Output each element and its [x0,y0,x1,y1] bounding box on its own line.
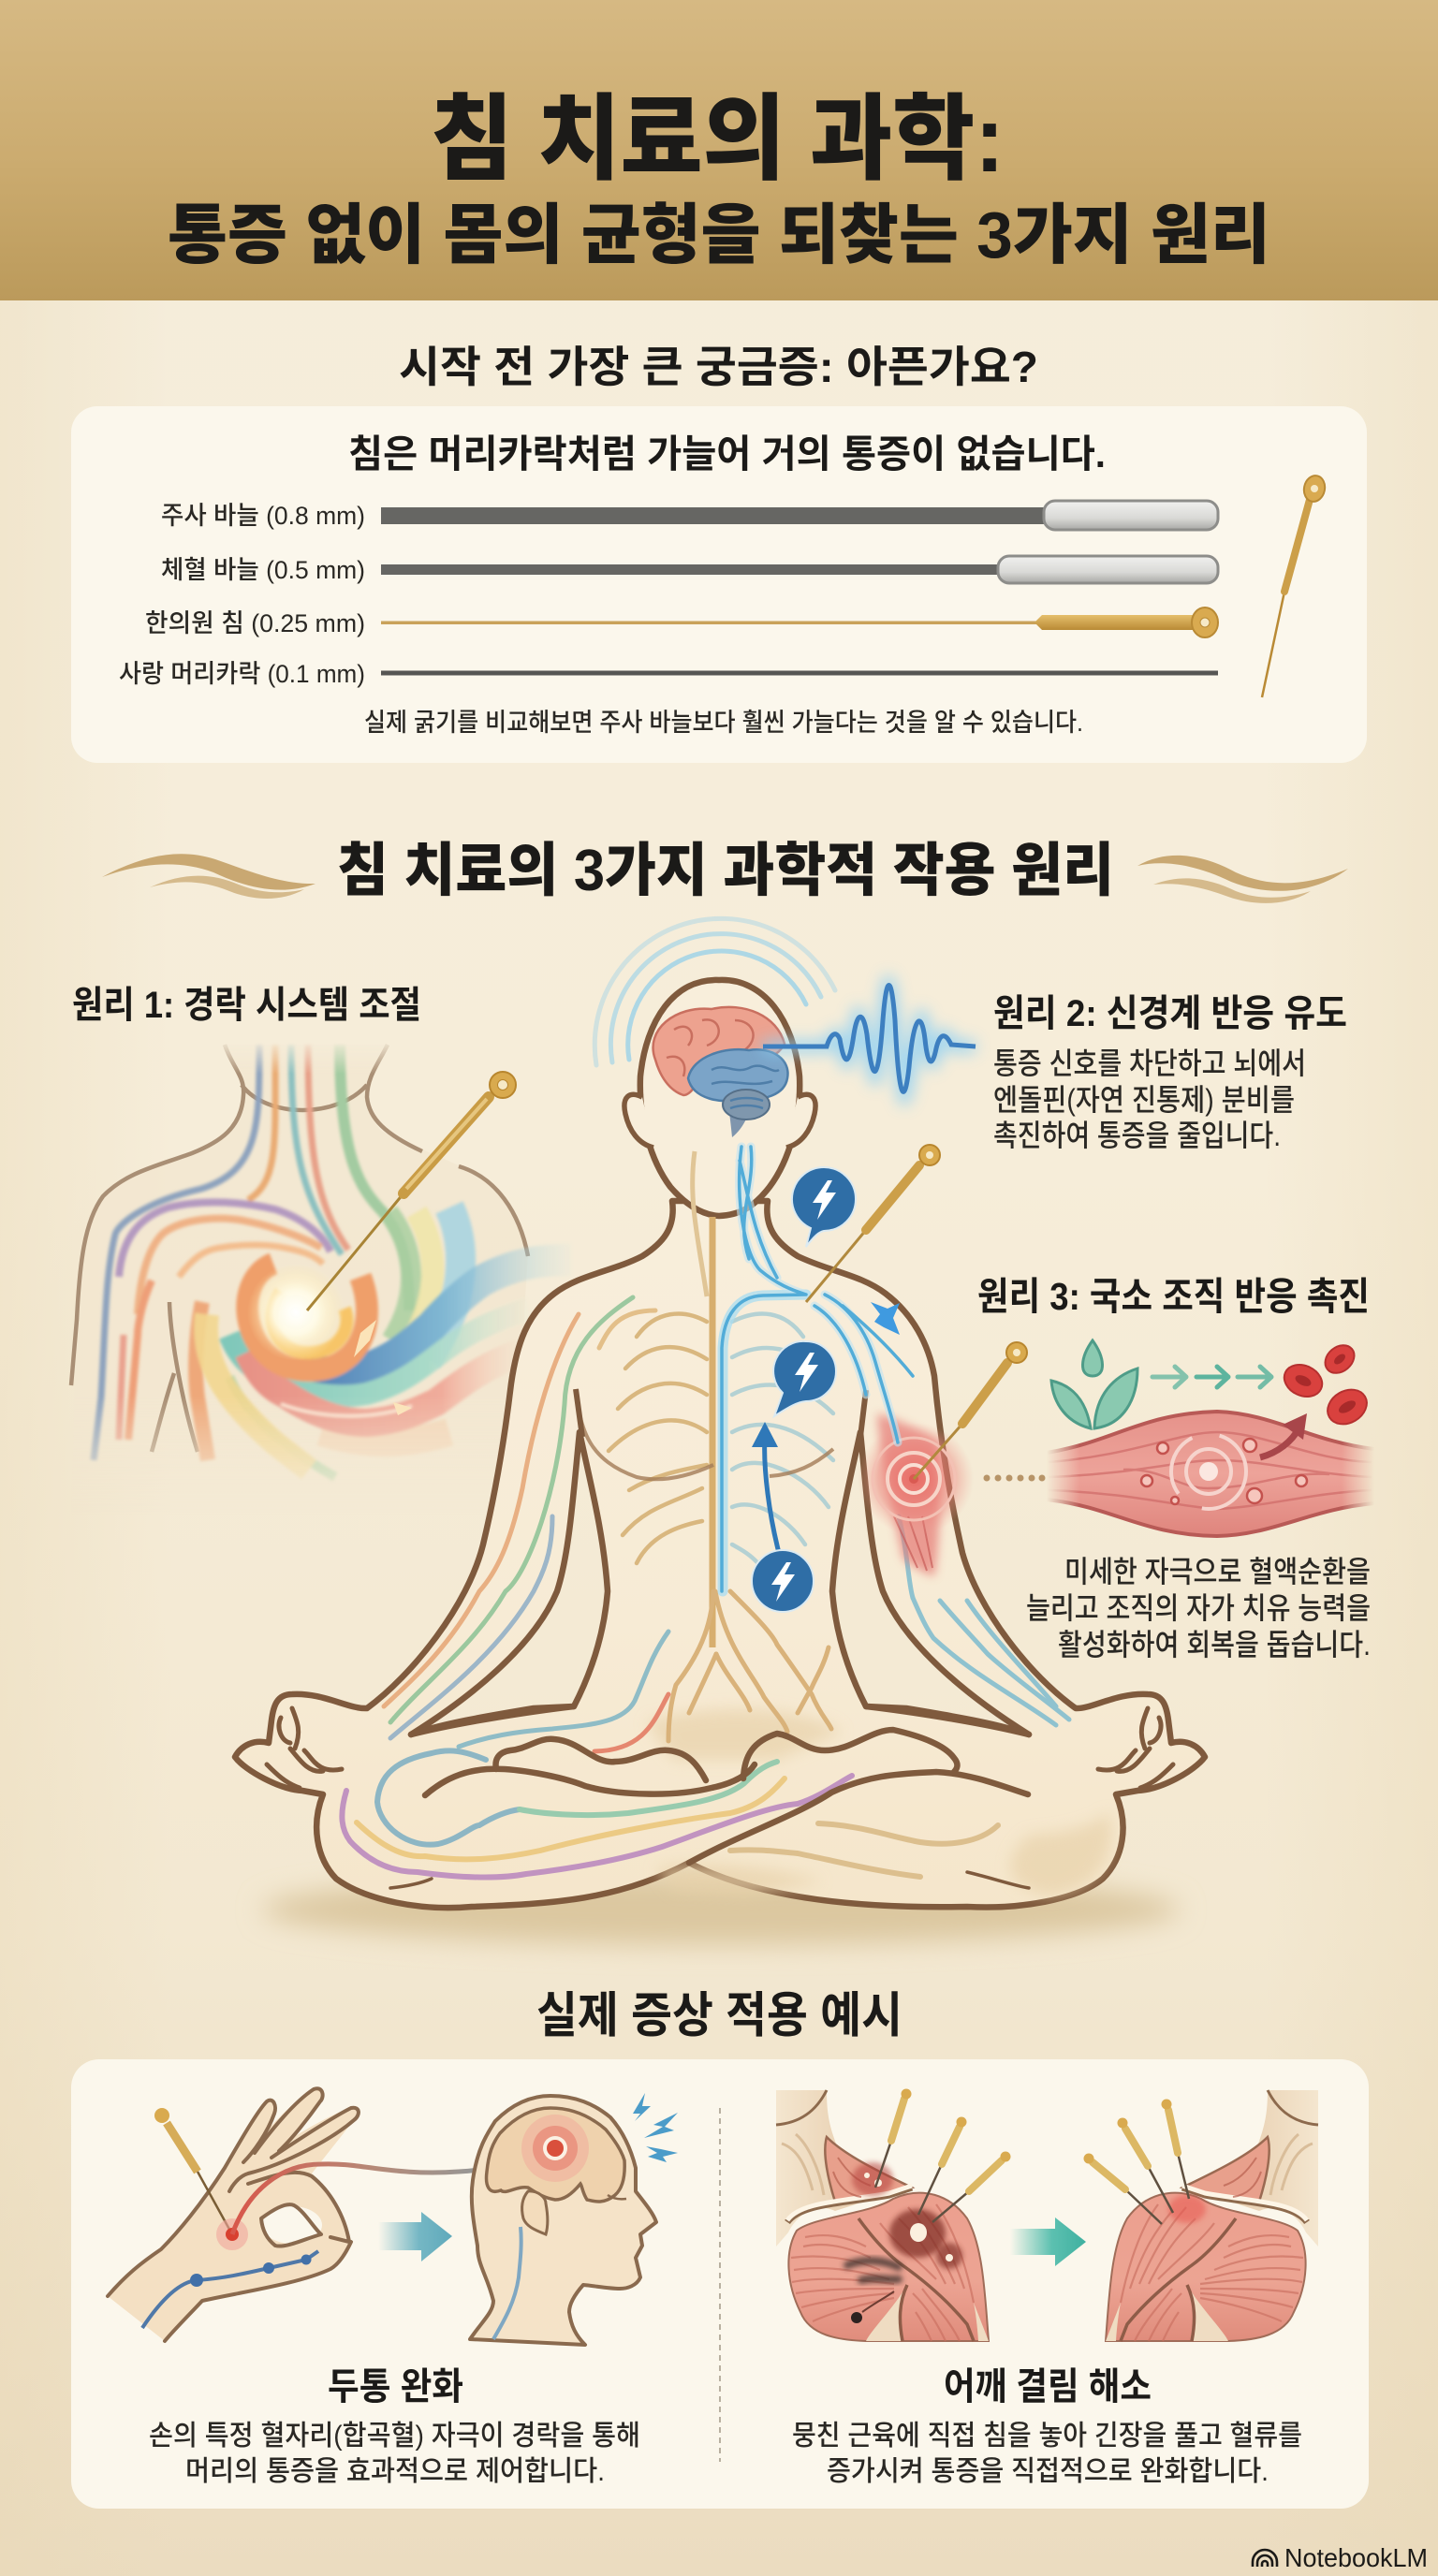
row: acupuncture needle [145,607,1218,637]
row: blood needle [161,556,1218,584]
body silhouette [235,1201,1205,1908]
row: acupuncture needle: 한의원 침 (0.25 mm) [145,609,365,637]
panel: symptom examples [71,2059,1369,2509]
flow arrowheads [354,1320,412,1415]
illustration: tense shoulder [776,2089,1011,2341]
needles [875,2089,1011,2222]
text: principle 3 description [1026,1555,1371,1661]
hand details [267,1708,1173,1888]
body shading [646,1709,1111,1895]
row: human hair [119,660,1218,688]
head [640,980,800,1216]
torso outlines [71,1045,528,1452]
icon: needle on shoulder [806,1145,940,1302]
pain area upper arm [858,1413,974,1576]
leg and foot outlines [411,1706,1029,1863]
text: shoulder description: 증가시켜 통증을 직접적으로 완화합니다. [827,2456,1269,2487]
text: shoulder description [792,2421,1302,2487]
brain [653,1007,788,1137]
illustration: relaxed shoulder [1084,2090,1318,2341]
label: principle 2 [993,993,1347,1152]
nerve pathways [722,1147,913,1591]
tension spots [847,2162,962,2323]
icon: gold needle [1262,474,1328,697]
icon: spark [871,1302,900,1335]
ribs left [609,1314,707,1563]
row: blood needle: 체혈 바늘 (0.5 mm) [161,556,365,584]
badge: lightning 3 [752,1550,814,1612]
connector nerve curve [232,2153,550,2234]
title line 2: 통증 없이 몸의 균형을 되찾는 3가지 원리 [168,198,1270,271]
arm crease left [576,1389,866,1437]
arrow [1010,2217,1086,2266]
acupoint [216,2218,248,2250]
title banner [0,0,1438,300]
icon: needle on arm [914,1342,1027,1479]
panel: needle thickness comparison [71,406,1367,763]
logo: NotebookLM: NotebookLM [1284,2543,1428,2572]
decorative swash left [102,854,315,899]
ribs right [732,1314,833,1610]
chest lines [576,1389,833,1479]
illustration: hand acupoint [108,2088,359,2341]
left arm meridians [384,1297,655,1738]
muscle fibre [1047,1412,1374,1536]
title line 1: 침 치료의 과학: [431,87,1005,192]
illustration: meridian system torso [71,1045,571,1516]
spine gold [694,1161,720,1694]
connector dots [983,1475,1045,1481]
badge: lightning 2 [773,1341,836,1416]
nerve arrow [752,1422,779,1553]
torso fill [71,1045,528,1516]
heading: biggest question: 시작 전 가장 큰 궁금증: 아픈가요? [399,343,1038,391]
text: principle 3 description: 늘리고 조직의 자가 치유 능력을 [1026,1591,1371,1625]
meridian blue [142,2251,318,2328]
figure: seated meditating body [235,918,1205,1908]
heading: three principles: 침 치료의 3가지 과학적 작용 원리 [337,839,1114,903]
lower torso lines [459,1591,831,1751]
leg meridians [342,1750,998,1878]
label: principle 2: 촉진하여 통증을 줄입니다. [993,1119,1281,1152]
illustration: tissue response [983,1339,1374,1536]
decorative swash right [1137,856,1348,903]
text: principle 3 description: 미세한 자극으로 혈액순환을 [1064,1555,1371,1588]
energy glow [251,1272,330,1357]
text: headache description [149,2421,640,2487]
text: headache description: 머리의 통증을 효과적으로 제어합니다. [185,2456,605,2487]
meridian strands [94,1045,461,1460]
icon: brain signal arcs [594,918,835,1065]
row: syringe needle: 주사 바늘 (0.8 mm) [161,502,365,530]
icon: pain bolts [633,2093,678,2162]
relief glow [1168,2195,1206,2223]
label: principle 3: 원리 3: 국소 조직 반응 촉진 [977,1275,1370,1318]
icon: red blood cells [1279,1339,1373,1431]
forearm nerves right [899,1516,1069,1725]
label: principle 1: 원리 1: 경락 시스템 조절 [72,985,421,1026]
badge: lightning 1 [792,1167,856,1247]
title: headache: 두통 완화 [328,2366,463,2408]
icon: needle [307,1072,516,1310]
description: 통증 신호를 차단하고 뇌에서 [993,1046,1306,1080]
row: human hair: 사랑 머리카락 (0.1 mm) [119,660,365,688]
ground shadow [262,1874,1180,1945]
illustration: head with pain [470,2093,678,2345]
chart: brain wave signal [763,982,976,1099]
label: principle 2: 엔돌핀(자연 진통제) 분비를 [993,1083,1295,1117]
text: principle 3 description: 활성화하여 회복을 돕습니다. [1058,1628,1371,1661]
needle [198,2172,232,2234]
arrow [378,2212,452,2261]
text: headache description: 손의 특정 혈자리(합곡혈) 자극이 경락을 통해 [149,2421,640,2452]
needles [1084,2099,1189,2224]
heading: real symptoms: 실제 증상 적용 예시 [536,1989,902,2043]
divider [719,2108,721,2462]
caption: 실제 굵기를 비교해보면 주사 바늘보다 훨씬 가늘다는 것을 알 수 있습니다. [364,709,1083,737]
flow ribbons [206,1260,571,1477]
row: syringe needle [161,501,1218,530]
title: shoulder stiffness: 어깨 결림 해소 [944,2366,1152,2408]
arrows [1152,1367,1271,1387]
text: shoulder description: 뭉친 근육에 직접 침을 놓아 긴장을 풀고 혈류를 [792,2421,1302,2452]
label: principle 2: 원리 2: 신경계 반응 유도 [993,993,1347,1034]
icon: leaves [1051,1340,1137,1428]
ears [624,1094,815,1148]
panel heading: 침은 머리카락처럼 가늘어 거의 통증이 없습니다. [348,432,1106,476]
